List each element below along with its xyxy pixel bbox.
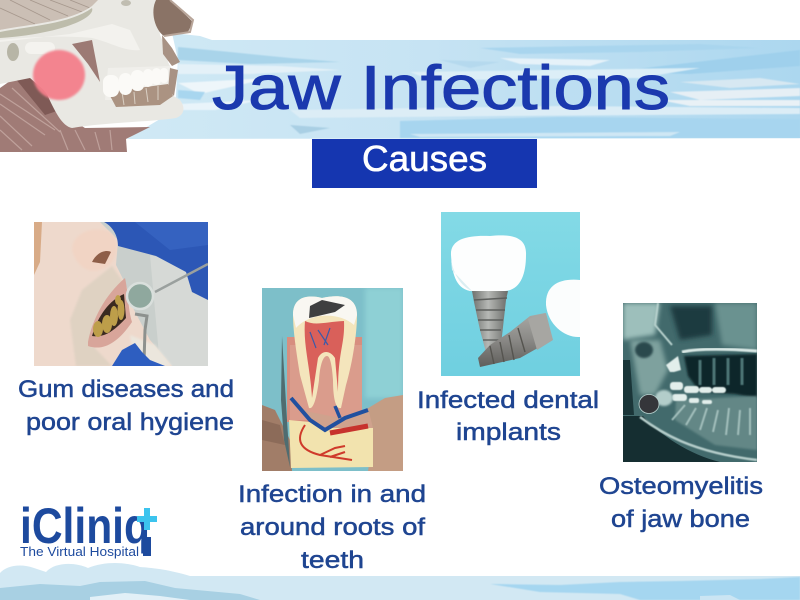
- label: dental implants: Infected dental: [417, 387, 599, 414]
- label: dental implants: [417, 387, 599, 446]
- label: osteomyelitis: of jaw bone: [611, 506, 750, 533]
- below jaw black: [623, 416, 720, 462]
- ramus: [630, 340, 668, 395]
- model side and gum: [281, 336, 290, 467]
- label: roots of teeth: Infection in and: [238, 481, 426, 508]
- beard: [70, 266, 125, 366]
- skull bone: [0, 0, 183, 128]
- logo descender: [143, 537, 151, 556]
- label: gum diseases: poor oral hygiene: [26, 409, 234, 436]
- banner: brushed blue background: [127, 33, 800, 139]
- upper skull: [623, 303, 660, 340]
- probe and lower glove: [135, 314, 147, 362]
- nasal cavity: [153, 0, 193, 36]
- tooth: [293, 296, 357, 408]
- face: [34, 222, 172, 366]
- label: osteomyelitis: Osteomyelitis: [599, 473, 763, 500]
- photo: dental mirror exam of gum disease: [34, 222, 208, 366]
- photo: tooth root model: [262, 288, 403, 471]
- upper tooth gaps: [700, 358, 742, 385]
- neck muscle: [0, 74, 150, 152]
- gum and roots: [108, 84, 173, 107]
- label: gum diseases: Gum diseases and: [18, 376, 234, 403]
- lesion: [639, 394, 659, 414]
- infected area: [33, 50, 85, 100]
- mouth: [88, 278, 132, 348]
- title: Jaw Infections: [212, 54, 670, 123]
- label: dental implants: implants: [456, 419, 561, 446]
- subtitle box: causes: [312, 138, 537, 188]
- mirror: [155, 264, 208, 292]
- label: osteomyelitis: [599, 473, 763, 533]
- label: roots of teeth: [238, 481, 426, 574]
- hand fingers: [262, 420, 285, 445]
- base block: [289, 420, 373, 468]
- temple muscle behind jaw: [72, 40, 100, 82]
- teeth: [93, 295, 124, 337]
- upright implant: [472, 291, 508, 356]
- top muscle: [0, 0, 100, 30]
- lower jaw with roots: [675, 396, 757, 450]
- bright bone lines: [640, 417, 757, 460]
- illustration: skull with infected jaw: [0, 0, 193, 152]
- pulp: [305, 321, 344, 398]
- back crown: [546, 280, 580, 337]
- label: roots of teeth: around roots of: [240, 514, 425, 541]
- footer wave band: [0, 563, 800, 600]
- label: gum diseases: [18, 376, 234, 436]
- blue and red vessels: [291, 398, 368, 430]
- crown: [451, 235, 526, 291]
- oral dark band: [684, 354, 757, 398]
- logo tagline: The Virtual Hospital: [20, 545, 139, 559]
- logo: iCliniq: iCliniq: [20, 498, 150, 554]
- angled implant: [478, 313, 552, 367]
- teeth: [103, 68, 168, 97]
- photo: dental implants: [441, 212, 580, 376]
- hands: [262, 405, 292, 471]
- decay cavity: [309, 300, 345, 318]
- glove top: [104, 222, 208, 300]
- label: roots of teeth: teeth: [301, 547, 364, 574]
- photo: jaw x-ray: [623, 303, 757, 462]
- subtitle box: causes: Causes: [362, 138, 487, 179]
- logo plus: [137, 508, 157, 530]
- teeth: [666, 356, 726, 404]
